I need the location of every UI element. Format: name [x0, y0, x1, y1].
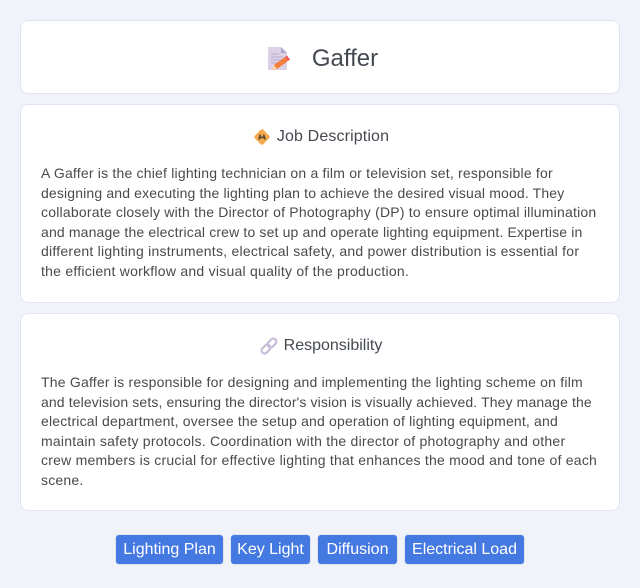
text: responsibility paragraph: maintain safety protocols. Coordination with the director of photography and other — [41, 432, 565, 448]
text: responsibility paragraph: crew members is crucial for effective lighting that enhances the mood and tone of each — [41, 452, 597, 468]
tag: electrical load: Electrical Load — [412, 541, 517, 558]
text: responsibility paragraph: The Gaffer is responsible for designing and implementing the lighting scheme on film — [41, 374, 583, 390]
tag: diffusion: Diffusion — [327, 541, 388, 558]
heading: responsibility: Responsibility — [284, 337, 382, 354]
text: job description paragraph: different lighting instruments, electrical safety, and power distribution is essential for — [41, 243, 579, 259]
tag: key light: Key Light — [237, 541, 304, 558]
text: job description paragraph: collaborate closely with the Director of Photography (DP) to ensure optimal illumination — [41, 204, 596, 220]
tag: electrical load — [405, 535, 524, 564]
text: responsibility paragraph: and television sets, ensuring the director's vision is visually achieved. They manage the — [41, 394, 592, 410]
text: job description paragraph: and manage the electrical crew to set up and operate lighting equipment. Expertise in — [41, 224, 582, 240]
title: Gaffer — [312, 45, 378, 72]
panel: title card — [20, 20, 620, 94]
icon: chain link — [260, 338, 278, 354]
heading: job description: Job Description — [277, 128, 389, 145]
text: responsibility paragraph: electrical department, oversee the setup and operation of lighting equipment, and — [41, 413, 558, 429]
panel: responsibility — [20, 313, 620, 511]
text: responsibility paragraph: scene. — [41, 472, 83, 488]
icon: document with pencil — [268, 47, 290, 70]
text: job description paragraph: designing and executing the lighting plan to achieve the desired visual mood. They — [41, 184, 564, 200]
tag: diffusion — [318, 535, 397, 564]
text: job description paragraph: A Gaffer is the chief lighting technician on a film or television set, responsible for — [41, 165, 553, 181]
text: responsibility paragraph — [41, 374, 597, 488]
text: job description paragraph — [41, 165, 596, 279]
tag: lighting plan: Lighting Plan — [123, 541, 216, 558]
icon: orange diamond sign — [254, 129, 270, 145]
text: job description paragraph: the efficient workflow and visual quality of the production. — [41, 262, 409, 278]
panel: job description — [20, 104, 620, 303]
tag: lighting plan — [116, 535, 223, 564]
tag: key light — [231, 535, 310, 564]
